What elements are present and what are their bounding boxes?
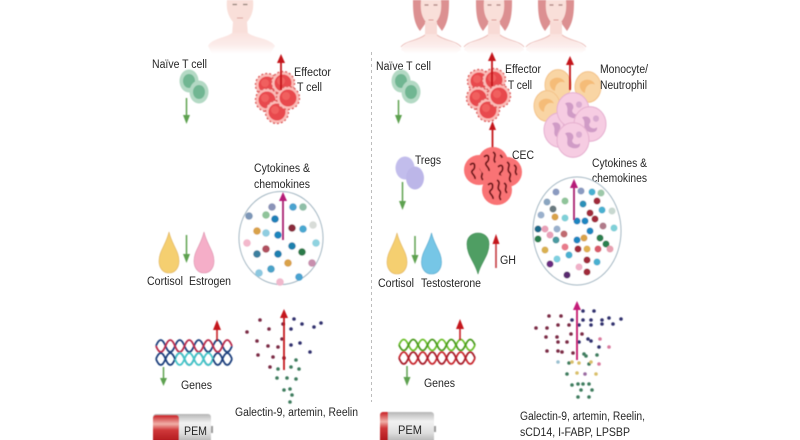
arrow: naive T cell down — [183, 98, 190, 124]
chart: cytokine circle — [533, 177, 621, 285]
icon: GH drop — [467, 233, 489, 274]
Cytokines label: Cytokines & — [592, 158, 647, 170]
arrow: genes down — [160, 367, 167, 386]
Effector T cell label — [505, 64, 541, 92]
icon: orange monocytes — [534, 70, 601, 121]
PEM label: PEM — [184, 426, 207, 438]
icon: naive T cells — [392, 70, 420, 104]
icon: effector T cells — [256, 72, 300, 124]
arrow: hormones down — [183, 235, 190, 263]
Cytokines label: chemokines — [592, 173, 647, 185]
icon: pink neutrophils — [544, 93, 606, 157]
arrow: monocyte up — [566, 56, 574, 90]
icon: estrogen drop — [194, 232, 214, 273]
arrow: genes up — [213, 320, 221, 341]
icon: effector T cells — [466, 68, 510, 122]
icon: cortisol drop — [159, 232, 179, 273]
arrow: naive T cell down — [395, 100, 402, 124]
Monocyte Neutrophil label — [600, 64, 649, 92]
arrow: biomarkers up — [573, 301, 581, 360]
icon: PEM battery — [380, 412, 436, 440]
CEC label: CEC — [512, 150, 534, 162]
arrow: cytokines up — [279, 192, 287, 240]
Cortisol Testosterone labels: Testosterone — [421, 278, 481, 290]
panel: male — [147, 0, 358, 440]
Effector T cell label: Effector — [505, 64, 541, 76]
Cortisol Testosterone labels — [378, 278, 481, 290]
biomarker label: Galectin-9, artemin, Reelin, — [520, 411, 645, 423]
chart: biomarker dots — [245, 317, 323, 404]
Effector T cell label: T cell — [508, 80, 532, 92]
GH label: GH — [500, 255, 516, 267]
Genes label: Genes — [424, 378, 455, 390]
arrow: genes down — [404, 366, 410, 386]
arrow: effector T cell up — [488, 52, 496, 86]
Effector T cell label: Effector — [294, 67, 331, 79]
arrow: CEC up — [489, 121, 496, 150]
icon: male bust — [208, 0, 275, 54]
Effector T cell label: T cell — [297, 82, 322, 94]
Effector T cell label — [294, 67, 331, 94]
icon: testosterone drop — [422, 233, 442, 274]
PEM label: PEM — [398, 425, 422, 437]
icon: naive T cells — [180, 70, 208, 104]
Cytokines label: chemokines — [254, 179, 310, 191]
Cytokines label: Cytokines & — [254, 163, 310, 175]
icon: cortisol drop — [387, 233, 407, 274]
biomarker label: sCD14, I-FABP, LPSBP — [520, 427, 630, 439]
arrow: effector T cell up — [277, 54, 285, 90]
arrow: cytokines up — [570, 179, 578, 220]
Cortisol Testosterone labels: Cortisol — [378, 278, 414, 290]
biomarker label — [520, 411, 645, 439]
Tregs label: Tregs — [415, 155, 441, 167]
arrow: genes up — [456, 319, 464, 340]
icon: Tregs cells — [396, 156, 424, 190]
chart: biomarker dots — [534, 309, 623, 399]
icon: female busts — [401, 0, 586, 54]
Cytokines label — [254, 163, 310, 191]
arrow: Tregs down — [399, 182, 406, 210]
icon: PEM battery — [153, 414, 213, 440]
icon: CEC cells — [464, 147, 522, 205]
Cytokines label — [592, 158, 647, 185]
Genes label: Genes — [181, 380, 212, 392]
icon: DNA genes — [399, 340, 475, 364]
panel divider — [370, 52, 372, 402]
icon: DNA genes — [156, 340, 232, 365]
Naive T cell label: Naïve T cell — [376, 61, 431, 73]
Cortisol Estrogen labels — [147, 276, 231, 288]
Cortisol Estrogen labels: Cortisol — [147, 276, 183, 288]
arrow: GH up — [492, 234, 500, 268]
Monocyte Neutrophil label: Monocyte/ — [600, 64, 649, 76]
biomarker label: Galectin-9, artemin, Reelin — [235, 407, 358, 419]
panel: female — [376, 0, 649, 440]
Monocyte Neutrophil label: Neutrophil — [600, 80, 647, 92]
Naive T cell label: Naïve T cell — [152, 59, 207, 71]
chart: cytokine circle — [239, 192, 323, 286]
arrow: biomarkers up — [280, 309, 288, 370]
Cortisol Estrogen labels: Estrogen — [189, 276, 231, 288]
arrow: hormones down — [412, 236, 418, 264]
